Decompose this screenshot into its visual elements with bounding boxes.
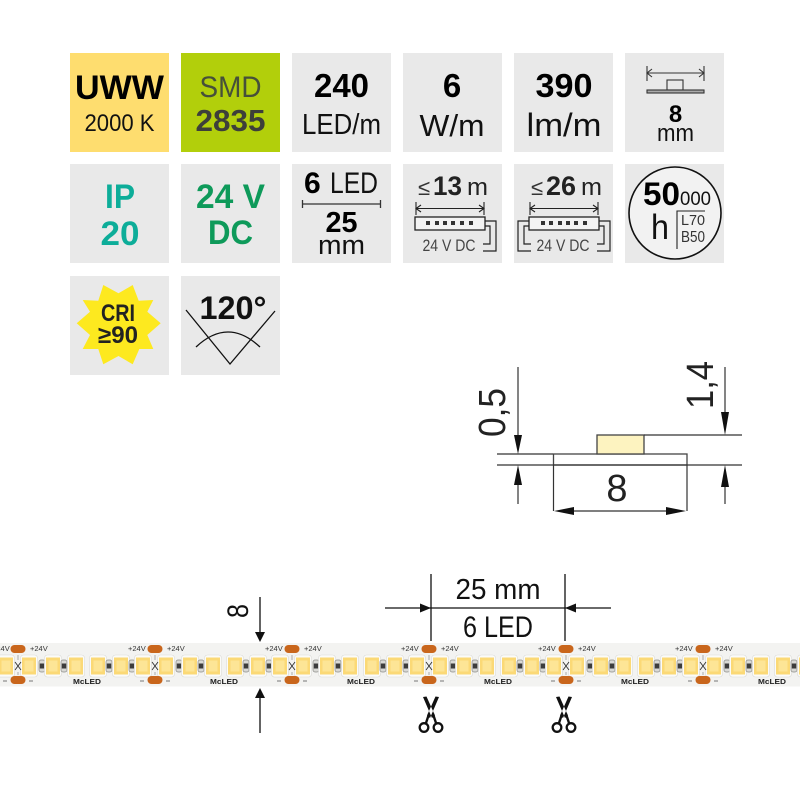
tile: LED density: [292, 53, 391, 152]
strip segment 3: +24V: [304, 644, 322, 653]
tile: LED density: 240: [314, 67, 369, 104]
tile: SMD type: [181, 53, 280, 152]
tile: IP rating: IP: [105, 178, 135, 216]
tile: power: 6: [443, 67, 461, 104]
tile: two-side feed max length: [514, 164, 613, 263]
tile: two-side feed max length: 26: [546, 171, 576, 201]
tile: cut length: 6: [304, 167, 321, 200]
tile: strip width: 8: [669, 101, 682, 128]
strip segment 6: [675, 644, 800, 686]
tile: lifetime: h: [651, 208, 669, 247]
tile: strip width: mm: [657, 120, 694, 147]
arrowheads: [514, 412, 729, 515]
strip segment 5: +24V: [578, 644, 596, 653]
icon: yellow star badge: [77, 285, 161, 364]
tile: power: W/m: [420, 108, 484, 143]
strip segment 6: McLED: [758, 677, 787, 686]
strip width dimension: 8: [222, 597, 265, 733]
tile: one-side feed max length: 24 V DC: [422, 236, 476, 255]
strip segment 6: +24V: [715, 644, 733, 653]
segment dimension: 25 mm / 6 LED: [385, 574, 611, 644]
segment dimension: 25 mm / 6 LED: 25 mm: [456, 574, 540, 606]
tile: colour rendering: ≥90: [98, 322, 138, 349]
label: width 8: 8: [606, 468, 628, 510]
strip segment 5: McLED: [621, 677, 650, 686]
tile: lifetime: [625, 164, 724, 263]
strip segment 2: +24V: [128, 644, 146, 653]
strip segment 3: McLED: [347, 677, 376, 686]
cross-section dimension drawing: [472, 361, 742, 515]
strip segment 5: [538, 644, 700, 686]
tile: strip width: [625, 53, 724, 152]
tile: SMD type: 2835: [196, 103, 266, 138]
tile: beam angle: [181, 276, 280, 375]
segment dimension: 25 mm / 6 LED: 6 LED: [463, 611, 533, 644]
tile: lifetime: 50: [643, 176, 680, 212]
tile: one-side feed max length: ≤: [418, 175, 430, 200]
tile: lifetime: B50: [681, 229, 705, 246]
strip segment 6: +24V: [675, 644, 693, 653]
tile: lifetime: L70: [681, 212, 705, 229]
tile: LED density: LED/m: [302, 109, 381, 141]
tile: luminous flux: 390: [536, 67, 592, 104]
tile: SMD type: SMD: [200, 71, 262, 104]
strip segment 4: McLED: [484, 677, 513, 686]
tile: cut length: 25: [326, 207, 358, 239]
strip segment 0: [0, 645, 14, 684]
tile: two-side feed max length: 24 V DC: [536, 236, 590, 255]
tile: lifetime: 000: [680, 189, 711, 210]
strip segment 3: [265, 644, 426, 686]
tile: colour rendering: [70, 276, 169, 375]
tile: colour temperature: UWW: [75, 69, 165, 107]
tile: one-side feed max length: [403, 164, 502, 263]
strip segment 2: [128, 644, 288, 686]
tile: two-side feed max length: ≤: [531, 175, 543, 200]
tile: cut length: [292, 164, 391, 263]
tile: IP rating: [70, 164, 169, 263]
tile: colour rendering: CRI: [101, 300, 135, 327]
tile: luminous flux: [514, 53, 613, 152]
strip segment 5: +24V: [538, 644, 556, 653]
tile: one-side feed max length: m: [467, 174, 488, 201]
tile: power: [403, 53, 502, 152]
icon: scissors left: [420, 696, 442, 732]
icon: scissors right: [553, 696, 575, 732]
strip segment 2: +24V: [167, 644, 185, 653]
tile: cut length: LED: [330, 167, 378, 200]
strip segment 1: McLED: [73, 677, 102, 686]
tile: two-side feed max length: m: [581, 174, 602, 201]
tile: cut length: mm: [318, 230, 365, 260]
strip segment 4: +24V: [401, 644, 419, 653]
strip segment 4: +24V: [441, 644, 459, 653]
strip segment 4: [401, 644, 562, 686]
tile: colour temperature: [70, 53, 169, 152]
label: thickness 0,5: 0,5: [472, 388, 514, 437]
tile: one-side feed max length: 13: [433, 171, 462, 201]
tile: beam angle: 120°: [200, 290, 266, 326]
tile: IP rating: 20: [100, 215, 140, 253]
strip segment 1: [0, 644, 152, 686]
strip cross-section: [554, 435, 687, 465]
label: height 1,4: 1,4: [680, 361, 722, 409]
strip segment 1: +24V: [30, 644, 48, 653]
strip segment 2: McLED: [210, 677, 239, 686]
tile: voltage: DC: [208, 214, 253, 252]
strip segment 3: +24V: [265, 644, 283, 653]
tile: luminous flux: lm/m: [526, 107, 602, 143]
strip width dimension: 8: 8: [222, 604, 255, 618]
tile: colour temperature: 2000 K: [84, 110, 154, 137]
tile: voltage: 24 V: [196, 178, 265, 216]
LED strip: [0, 643, 800, 686]
tile: voltage: [181, 164, 280, 263]
